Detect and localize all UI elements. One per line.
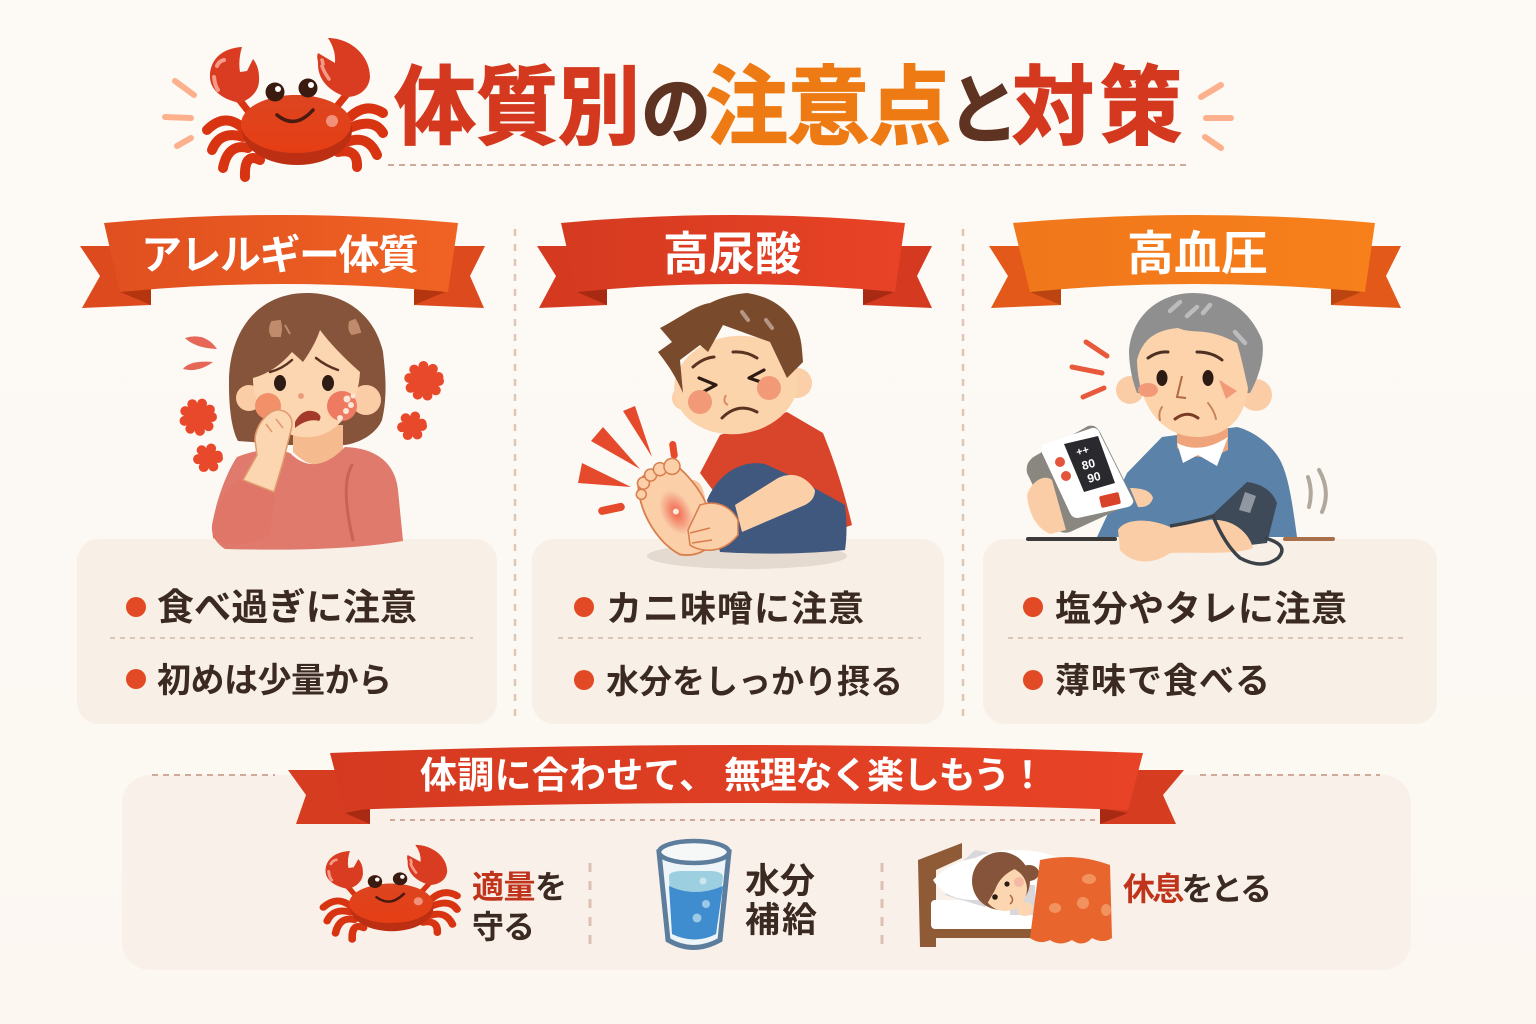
title: 体質別 (394, 59, 640, 155)
panel: hypertension advice: 塩分やタレに注意 (1055, 588, 1347, 629)
hand and arm (212, 480, 275, 544)
shirt (700, 412, 852, 530)
monitor (1027, 426, 1135, 533)
table edge (1028, 537, 1115, 541)
hair (1129, 293, 1263, 393)
title: 注意点 (706, 59, 951, 155)
text: hydration: 水分 (745, 862, 815, 901)
ribbon: hypertension: 高血圧 (1127, 227, 1268, 280)
bottom banner: 体調に合わせて、 (420, 755, 716, 796)
panel: allergy advice: 食べ過ぎに注意 (157, 587, 417, 628)
panel: hypertension advice: 薄味で食べる (1055, 662, 1270, 701)
text: hydration: 補給 (745, 901, 817, 940)
panel: allergy advice (77, 539, 497, 724)
illustration: boy with sore foot (578, 293, 852, 569)
alarm strokes (1072, 342, 1107, 397)
ribbon: hypertension (989, 215, 1401, 308)
illustration: man with blood pressure monitor: 90 (1086, 469, 1103, 486)
title: 対策 (1012, 59, 1182, 155)
face (1137, 328, 1248, 437)
face (253, 330, 360, 437)
panel: hyperuricemia advice: 水分をしっかり摂る (606, 663, 903, 700)
title (394, 59, 1182, 155)
illustration: man with blood pressure monitor: 80 (1080, 456, 1097, 473)
text: take a rest: 休息をとる (1123, 871, 1272, 907)
ribbon: allergy (80, 215, 485, 308)
title: の (641, 71, 711, 153)
panel: hyperuricemia advice: カニ味噌に注意 (606, 588, 864, 629)
rash marks (184, 366, 439, 468)
forearm (1118, 520, 1253, 561)
neck (293, 425, 343, 465)
back foot and arm (690, 480, 706, 510)
ribbon: hyperuricemia (537, 215, 932, 308)
bottom panel (122, 775, 1411, 970)
wrinkles (1159, 382, 1232, 420)
icon: small crab (323, 845, 457, 939)
motion marks (1308, 470, 1326, 512)
mouth (295, 411, 320, 428)
sweater (1097, 427, 1297, 537)
neck and collar (1177, 425, 1228, 457)
hand holding monitor (1027, 478, 1066, 534)
eyes (274, 375, 286, 391)
mouth (722, 408, 757, 418)
hair (229, 293, 386, 445)
alarm strokes (183, 336, 217, 370)
panel: allergy advice: 初めは少量から (157, 662, 392, 700)
ears (782, 368, 812, 398)
bottom banner: 無理なく楽しもう！ (724, 755, 1046, 796)
text: hydration (745, 862, 817, 940)
panel: hyperuricemia advice (532, 539, 944, 724)
text: keep portions: 守る (472, 909, 535, 945)
illustration: man with blood pressure monitor: ++ (1075, 444, 1090, 459)
right thumb (1130, 488, 1153, 507)
illustration: woman with allergy (183, 293, 439, 550)
pain marks (578, 406, 678, 516)
blush (688, 390, 712, 414)
ears (1116, 376, 1144, 404)
mouth (1175, 414, 1198, 419)
ribbon: allergy: アレルギー体質 (141, 232, 419, 278)
text: keep portions: 適量を (472, 869, 567, 905)
icon: girl resting in bed (918, 843, 1112, 947)
bottom banner (288, 745, 1184, 824)
left sparkle ticks (165, 81, 194, 146)
eyes (1156, 370, 1168, 386)
tube (1170, 516, 1282, 564)
face (668, 328, 804, 442)
sweater (212, 447, 403, 550)
eyes (699, 370, 764, 392)
pants (707, 463, 846, 554)
ribbon: hyperuricemia: 高尿酸 (663, 228, 801, 280)
blush and rash on cheeks (255, 393, 281, 419)
crab mascot (207, 38, 383, 177)
foot (627, 452, 725, 567)
blush (1138, 383, 1158, 397)
blood pressure cuff (1210, 482, 1277, 545)
illustration: man with blood pressure monitor (1027, 293, 1333, 564)
panel: hypertension advice (983, 539, 1437, 724)
icon: glass of water (659, 841, 729, 948)
hair (658, 293, 803, 393)
floor shadow (647, 543, 847, 569)
ears (236, 385, 262, 411)
text: keep portions (472, 869, 567, 945)
right sparkle ticks (1201, 85, 1231, 148)
hand (688, 503, 738, 550)
title: と (947, 68, 1019, 153)
